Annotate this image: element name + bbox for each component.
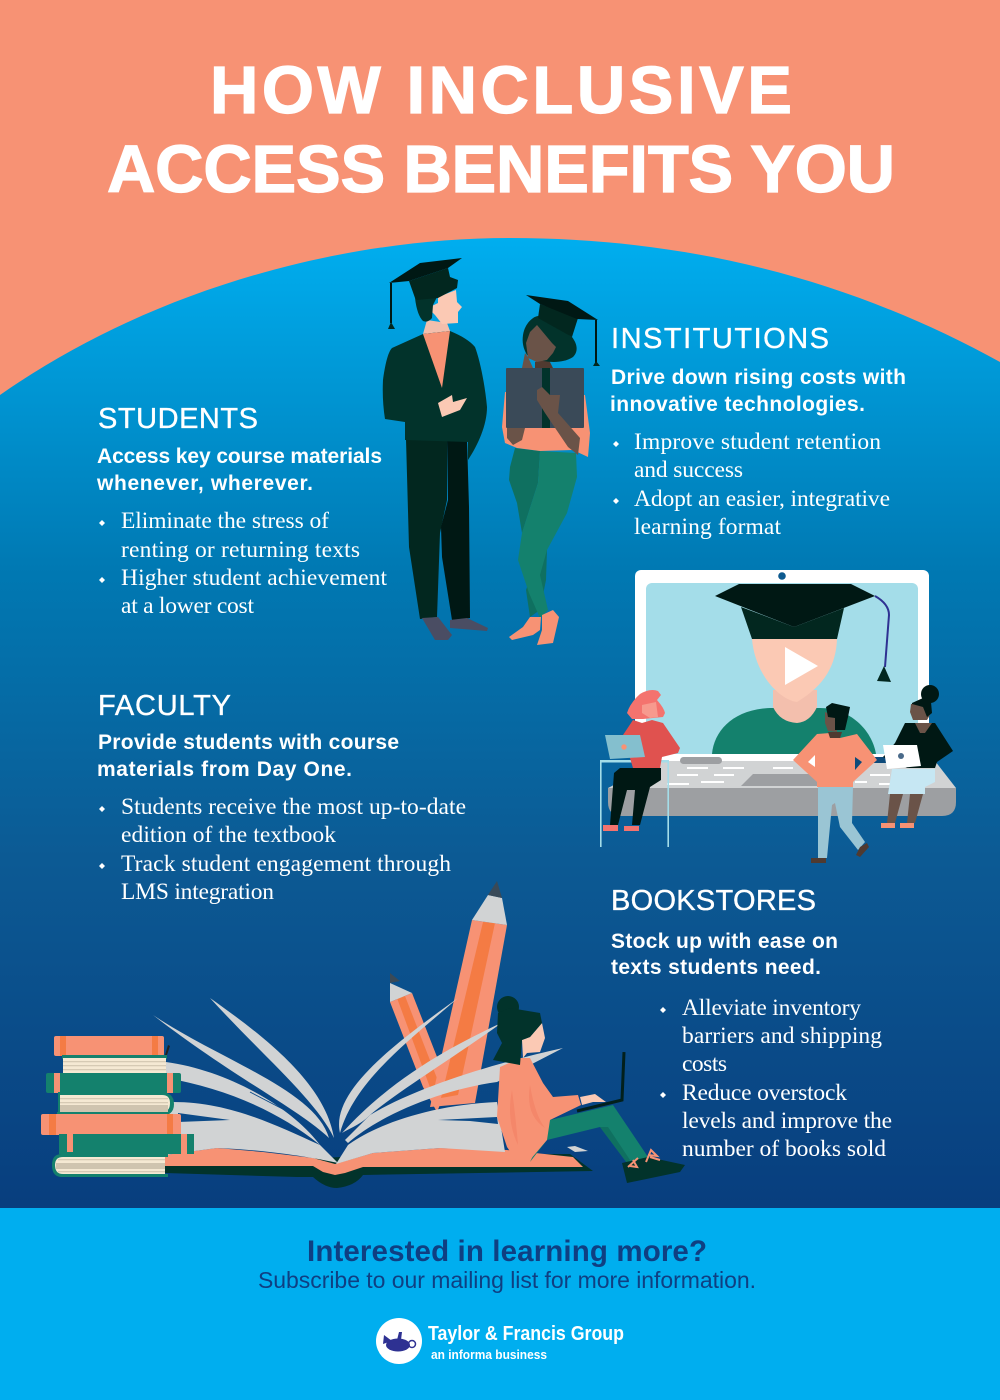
text block: bookstores: levels and improve the (682, 1108, 892, 1134)
text block: faculty: Students receive the most up-to-date (121, 794, 466, 820)
illustration: laptop with video and students (600, 570, 956, 863)
text block: faculty: materials from Day One. (97, 758, 352, 781)
text block: bookstores: Reduce overstock (682, 1080, 847, 1106)
panel: blue curved background (0, 238, 1000, 1208)
text block: faculty (97, 690, 466, 905)
footer call to action: Subscribe to our mailing list for more information. (258, 1267, 756, 1293)
text block: faculty: FACULTY (98, 690, 231, 722)
title: HOW INCLUSIVE (210, 53, 792, 128)
title: ACCESS BENEFITS YOU (107, 132, 895, 207)
text block: bookstores: number of books sold (682, 1136, 886, 1162)
text block: institutions: learning format (634, 514, 781, 540)
text block: students: whenever, wherever. (96, 472, 313, 495)
text block: students: renting or returning texts (121, 537, 360, 563)
figure: reader with laptop (493, 996, 685, 1183)
text block: institutions (610, 323, 906, 540)
text block: faculty: edition of the textbook (121, 822, 336, 848)
text block: bookstores: Alleviate inventory (682, 995, 861, 1021)
text block: institutions: Adopt an easier, integrative (634, 486, 890, 512)
text block: students (96, 403, 387, 619)
text block: students: Higher student achievement (121, 565, 387, 591)
text block: institutions: Improve student retention (634, 429, 881, 455)
logo: Taylor & Francis Group: Taylor & Francis Group (428, 1323, 624, 1345)
text block: students: STUDENTS (98, 403, 258, 435)
text block: bookstores: BOOKSTORES (611, 885, 816, 917)
open book (153, 998, 593, 1188)
text block: bookstores: texts students need. (611, 956, 821, 979)
text block: faculty: LMS integration (121, 879, 274, 905)
text block: bookstores: costs (682, 1051, 727, 1077)
text block: students: at a lower cost (121, 593, 254, 619)
icon: stack of books (41, 1036, 194, 1177)
header background (0, 0, 1000, 420)
footer call to action: Interested in learning more? (307, 1235, 707, 1268)
illustration: open book with pencils, book stack and reader (41, 881, 685, 1188)
title (107, 53, 895, 207)
illustration: two graduates (383, 258, 600, 645)
text block: institutions: INSTITUTIONS (611, 323, 829, 355)
text block: bookstores (611, 885, 892, 1162)
logo: Taylor & Francis Group: an informa business (431, 1348, 547, 1362)
text block: faculty: Track student engagement through (121, 851, 451, 877)
icon: small pencil (390, 973, 448, 1112)
figure: seated woman at table (600, 690, 680, 847)
figure: person on keyboard with laptop (881, 685, 953, 828)
text block: students: Eliminate the stress of (121, 508, 329, 534)
text block: institutions: innovative technologies. (610, 393, 865, 416)
text block: faculty: Provide students with course (98, 731, 399, 754)
text block: institutions: and success (634, 457, 743, 483)
text block: bookstores: Stock up with ease on (611, 930, 838, 953)
figure: standing person (793, 703, 877, 863)
logo: Taylor & Francis Group (376, 1318, 624, 1364)
footer call to action (258, 1235, 756, 1293)
icon: large pencil (430, 881, 507, 1107)
text block: institutions: Drive down rising costs with (611, 366, 906, 389)
text block: bookstores: barriers and shipping (682, 1023, 882, 1049)
text block: students: Access key course materials (97, 445, 382, 468)
footer band (0, 1208, 1000, 1400)
